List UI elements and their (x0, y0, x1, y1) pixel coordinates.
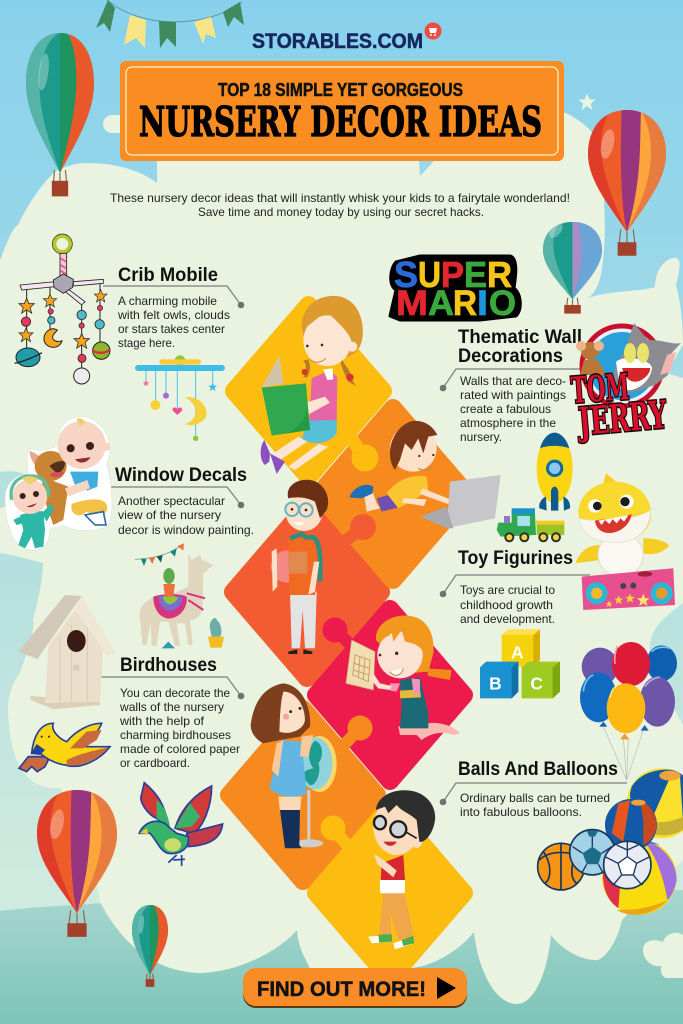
icon: green bird (139, 783, 223, 866)
body text (460, 583, 555, 626)
body text: Walls that are deco- (460, 374, 566, 388)
panel: Window Decals (108, 465, 254, 537)
icon: ABC blocks: C (530, 673, 543, 693)
icon: toy train (497, 508, 564, 541)
icon: crib mobile (15, 234, 110, 384)
red knob (345, 514, 376, 541)
character: boy with laptop (349, 421, 501, 528)
icon: ABC blocks (480, 629, 560, 698)
balloon top left (26, 33, 94, 196)
icon: Super Mario logo: P (441, 254, 464, 295)
body text (460, 374, 566, 444)
basketball (538, 843, 584, 890)
teal wedge left (0, 471, 32, 508)
panel: Toy Figurines (440, 548, 590, 626)
leader line (108, 487, 244, 508)
body text: with felt owls, clouds (117, 308, 230, 322)
heading: Window Decals: Window Decals (115, 465, 247, 486)
button: find out more (243, 968, 467, 1008)
arrow icon (437, 977, 456, 999)
body text: Ordinary balls can be turned (460, 791, 610, 805)
panel: Crib Mobile (103, 265, 244, 350)
icon: llama with bunting (135, 543, 224, 648)
heading: Thematic Wall Decorations: Thematic Wall (458, 327, 582, 348)
body text: or cardboard. (120, 756, 190, 770)
leader line (103, 286, 244, 308)
icon: Super Mario logo: R (487, 254, 512, 295)
puzzle piece yellow top (234, 305, 383, 477)
character: boy with glasses (368, 790, 435, 949)
orange knob (343, 716, 372, 746)
heading: Crib Mobile: Crib Mobile (118, 265, 218, 286)
character: boy with backpack (271, 480, 328, 654)
logo: Storables.com: STORABLES.COM (252, 30, 423, 53)
body text (117, 294, 230, 350)
icon: Super Mario logo: O (489, 284, 516, 323)
intro text (110, 191, 570, 219)
icon: yellow bird (19, 723, 110, 772)
button label: FIND OUT MORE! (257, 978, 426, 1001)
body text: rated with paintings (460, 388, 566, 402)
blue soccer ball (570, 830, 615, 875)
leader line (440, 369, 580, 391)
character: girl with globe (251, 683, 337, 848)
puzzle piece yellow lower (316, 807, 464, 979)
heading: Toy Figurines: Toy Figurines (458, 548, 573, 569)
panel: Birdhouses (100, 655, 244, 770)
body text (118, 494, 254, 537)
body text: childhood growth (460, 598, 553, 612)
small striped ball (605, 799, 657, 851)
icon: Super Mario logo: A (428, 284, 454, 323)
icon: birdhouse (18, 595, 116, 709)
large beach ball (602, 840, 677, 915)
icon: Super Mario logo: E (464, 254, 487, 295)
icon: balls (538, 768, 683, 915)
puzzle piece red-orange (233, 506, 381, 678)
body text: view of the nursery (118, 508, 221, 522)
body text: and development. (460, 612, 555, 626)
body text: Another spectacular (118, 494, 225, 508)
balloon mid right (543, 222, 602, 314)
puzzle piece orange top (319, 408, 467, 580)
icon: hanging mobile (135, 355, 225, 441)
intro text: Save time and money today by using our secret hacks. (198, 205, 484, 219)
body text (460, 791, 610, 819)
body text: Toys are crucial to (460, 583, 555, 597)
icon: toy rocket (537, 433, 573, 511)
icon: Super Mario logo (390, 254, 520, 323)
white soccer ball (604, 841, 651, 889)
heading: Thematic Wall Decorations: Decorations (458, 346, 563, 367)
small cloud bottom right (643, 933, 683, 978)
puzzle diamonds (229, 305, 467, 979)
leader line (440, 783, 627, 805)
icon: baby shark toy (576, 473, 675, 610)
balloon lower left (37, 790, 117, 937)
icon: Super Mario logo: S (394, 254, 418, 295)
body text: made of colored paper (120, 742, 240, 756)
body text: or stars takes center (118, 322, 225, 336)
body text: stage here. (118, 336, 175, 350)
body text: with the help of (119, 714, 205, 728)
crimson knob (322, 618, 352, 646)
body text: You can decorate the (120, 686, 230, 700)
balloon bottom small (132, 905, 168, 987)
icon: balloon bunch (580, 642, 677, 780)
body text (119, 686, 240, 770)
panel: Balls And Balloons (440, 759, 627, 819)
body text: charming birdhouses (120, 728, 231, 742)
body text: into fabulous balloons. (460, 805, 582, 819)
body text: A charming mobile (118, 294, 217, 308)
small cloud pill (103, 115, 143, 133)
body text: walls of the nursery (119, 700, 224, 714)
heading: Thematic Wall Decorations (458, 327, 582, 367)
sky wedge under banner (419, 161, 434, 176)
icon: ABC blocks: B (489, 673, 502, 693)
puzzle piece crimson (316, 609, 464, 781)
star decoration (578, 94, 596, 110)
puzzle piece orange lower (229, 709, 377, 881)
icon: Super Mario logo: U (418, 254, 441, 295)
body text: atmosphere in the (460, 416, 556, 430)
body text: create a fabulous (460, 402, 551, 416)
icon: Tom and Jerry logo: TOM (570, 366, 630, 412)
body text: decor is window painting. (118, 523, 254, 537)
icon: cartoon kids sticker (5, 417, 112, 550)
title banner (120, 61, 564, 161)
icon: Tom and Jerry logo (570, 323, 681, 444)
icon: Super Mario logo: I (477, 284, 488, 323)
heading: Balls And Balloons: Balls And Balloons (458, 759, 618, 780)
body text: nursery. (460, 430, 502, 444)
yellow lower knob (320, 816, 351, 850)
leader line (440, 575, 590, 597)
yellow knob (350, 436, 378, 472)
heading: Birdhouses: Birdhouses (120, 655, 217, 676)
title line one: TOP 18 SIMPLE YET GORGEOUS (218, 80, 463, 100)
big striped ball (627, 768, 683, 838)
icon: Super Mario logo: R (453, 284, 477, 323)
balloon top right (588, 110, 666, 256)
panel: Thematic Wall Decorations (440, 327, 582, 444)
intro text: These nursery decor ideas that will instantly whisk your kids to a fairytale wonderland! (110, 191, 570, 205)
background hill (0, 890, 683, 1024)
icon: ABC blocks: A (511, 642, 524, 662)
icon: Super Mario logo: M (396, 284, 428, 323)
leader line (100, 677, 244, 699)
character: girl with map (346, 616, 460, 740)
bunting flags (96, 0, 244, 48)
character: girl reading book (261, 296, 363, 474)
